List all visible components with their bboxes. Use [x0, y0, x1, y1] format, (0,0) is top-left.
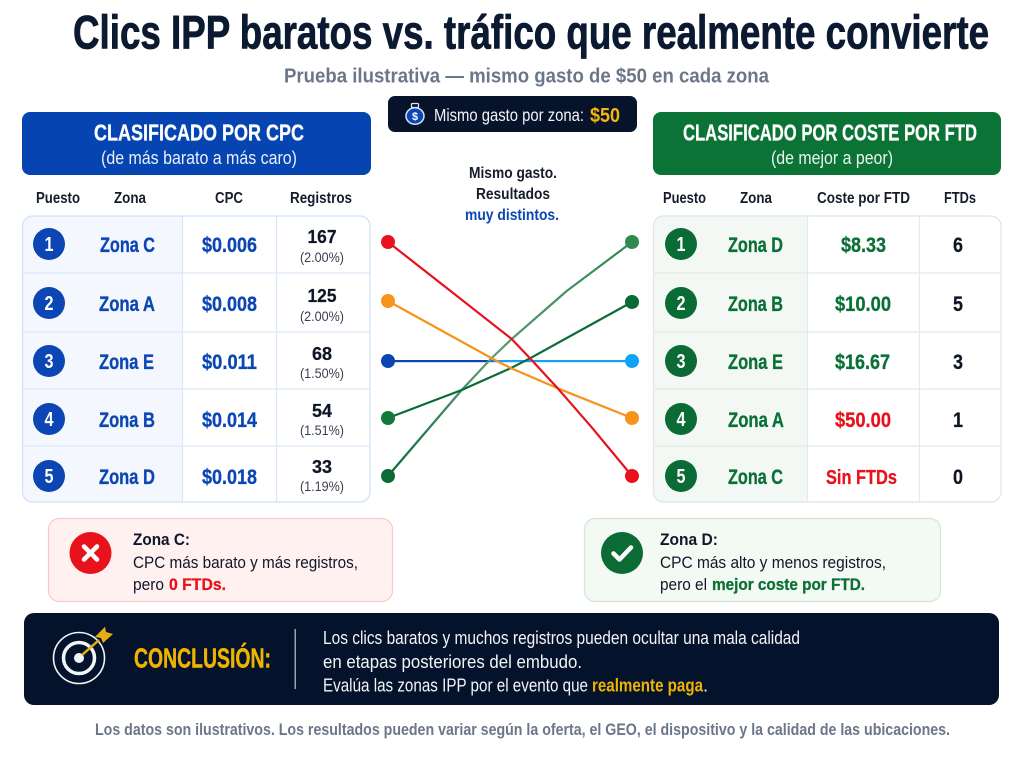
- row 4: Zona B: [33, 400, 344, 438]
- row 4: Zona A: $50.00: [835, 409, 891, 432]
- column headers: FTD table: Zona: [740, 190, 772, 207]
- row 1: Zona D: 6: [953, 234, 963, 257]
- row 2: Zona A: (2.00%): [300, 309, 344, 324]
- row 2: Zona B: [665, 287, 963, 319]
- icon: green check: [601, 532, 643, 574]
- callout: Zona D: Zona D:: [660, 530, 718, 549]
- column headers: CPC table: Registros: [290, 190, 352, 207]
- column headers: FTD table: Coste por FTD: [817, 190, 910, 207]
- badge: same spend per zone: $50: [590, 105, 620, 127]
- row 1: Zona C: $0.006: [202, 234, 257, 257]
- column headers: FTD table: Puesto: [663, 190, 706, 207]
- row 4: Zona B: Zona B: [99, 409, 155, 432]
- heading: ranked by CPC: CLASIFICADO POR CPC: [94, 120, 304, 146]
- center note: Mismo gasto.: [469, 165, 557, 182]
- column headers: FTD table: [663, 190, 976, 207]
- row 4: Zona A: 4: [676, 409, 686, 431]
- row 1: Zona D: 1: [676, 234, 686, 256]
- icon: target with arrow: [54, 627, 113, 684]
- row 1: Zona D: Zona D: [728, 234, 783, 257]
- row 2: Zona A: 125: [308, 285, 336, 306]
- panel: ranked by CPC: [22, 112, 371, 502]
- row 1: Zona C: Zona C: [100, 234, 155, 257]
- row 2: Zona B: 5: [953, 293, 963, 316]
- row 3: Zona E: 3: [953, 351, 963, 374]
- callout: Zona D: pero el: [660, 575, 707, 594]
- panel: conclusion: en etapas posteriores del embudo.: [323, 651, 582, 672]
- row 5: Zona D: Zona D: [99, 466, 155, 489]
- heading: ranked by CPC: [22, 112, 371, 175]
- row 5: Zona D: 5: [44, 466, 54, 488]
- row 2: Zona A: 2: [44, 293, 54, 315]
- callout: Zona C: pero: [133, 575, 164, 594]
- row 5: Zona D: $0.018: [202, 466, 257, 489]
- row 3: Zona E: $0.011: [202, 351, 257, 374]
- row 1: Zona C: 1: [44, 234, 54, 256]
- row 3: Zona E: 3: [676, 351, 686, 373]
- row 4: Zona B: (1.51%): [300, 423, 344, 438]
- row 5: Zona C: 0: [953, 466, 963, 489]
- row 5: Zona C: [665, 460, 963, 492]
- row 5: Zona C: 5: [676, 466, 686, 488]
- panel: conclusion: CONCLUSIÓN:: [134, 643, 271, 674]
- panel: conclusion: Los clics baratos y muchos registros pueden ocultar una mala calidad: [323, 627, 800, 648]
- center note: muy distintos.: [465, 207, 559, 224]
- row 4: Zona B: 54: [312, 400, 333, 421]
- panel: conclusion: realmente paga: [592, 674, 704, 696]
- callout: Zona D: CPC más alto y menos registros,: [660, 553, 886, 572]
- line: Zona B: [381, 295, 639, 425]
- column headers: FTD table: FTDs: [944, 190, 976, 207]
- line: Zona D: [381, 235, 639, 483]
- panel: conclusion: .: [703, 674, 708, 696]
- row 2: Zona A: Zona A: [99, 293, 155, 316]
- row 4: Zona A: Zona A: [728, 409, 784, 432]
- heading: ranked by CPC: (de más barato a más caro): [101, 148, 297, 168]
- icon: money bag: $: [412, 111, 418, 123]
- column headers: CPC table: CPC: [215, 190, 243, 207]
- row 3: Zona E: [33, 343, 344, 381]
- row 1: Zona D: [665, 228, 963, 260]
- row 3: Zona E: $16.67: [835, 351, 890, 374]
- center note: Resultados: [476, 186, 550, 203]
- row 3: Zona E: Zona E: [728, 351, 783, 374]
- icon: money bag: [406, 104, 424, 124]
- callout: Zona C: Zona C:: [133, 530, 190, 549]
- row 3: Zona E: 3: [44, 351, 54, 373]
- row 1: Zona D: $8.33: [841, 234, 886, 257]
- row 3: Zona E: (1.50%): [300, 366, 344, 381]
- row 5: Zona D: [33, 456, 344, 494]
- row 3: Zona E: Zona E: [99, 351, 154, 374]
- subtitle: Prueba ilustrativa — mismo gasto de $50 en cada zona: [284, 66, 770, 88]
- table: CPC ranking: [22, 216, 370, 502]
- row 3: Zona E: 68: [312, 343, 332, 364]
- icon: red cross: [70, 532, 112, 574]
- table: FTD ranking: [653, 216, 1001, 502]
- row 2: Zona A: $0.008: [202, 293, 257, 316]
- row 5: Zona D: (1.19%): [300, 479, 344, 494]
- panel: ranked by cost per FTD: [653, 112, 1001, 502]
- line: Zona C: [381, 235, 639, 483]
- row 1: Zona C: [33, 226, 344, 265]
- callout: Zona C: [48, 518, 392, 602]
- row 1: Zona C: 167: [308, 226, 336, 247]
- callout: Zona C: CPC más barato y más registros,: [133, 553, 358, 572]
- callout: Zona C: 0 FTDs.: [169, 575, 226, 594]
- column headers: CPC table: [36, 190, 352, 207]
- callout: Zona D: mejor coste por FTD.: [712, 575, 865, 594]
- column headers: CPC table: Puesto: [36, 190, 80, 207]
- column headers: CPC table: Zona: [114, 190, 146, 207]
- row 4: Zona B: $0.014: [202, 409, 257, 432]
- line: Zona A: [381, 294, 639, 425]
- panel: conclusion: Evalúa las zonas IPP por el evento que: [323, 674, 588, 696]
- badge: same spend per zone: [388, 96, 637, 132]
- row 2: Zona B: 2: [676, 293, 686, 315]
- row 5: Zona C: Sin FTDs: [826, 467, 897, 489]
- panel: conclusion: [24, 613, 999, 705]
- heading: ranked by cost per FTD: [653, 112, 1001, 175]
- row 4: Zona B: 4: [44, 409, 54, 431]
- heading: ranked by cost per FTD: (de mejor a peor): [771, 148, 893, 168]
- row 5: Zona D: 33: [312, 456, 332, 477]
- row 2: Zona B: Zona B: [728, 293, 783, 316]
- row 4: Zona A: [665, 403, 963, 435]
- row 5: Zona C: Zona C: [728, 466, 783, 489]
- callout: Zona D: [584, 518, 940, 602]
- center note: [465, 165, 559, 224]
- badge: same spend per zone: Mismo gasto por zona:: [434, 105, 584, 125]
- chart: rank connection lines: [381, 235, 639, 483]
- row 2: Zona A: [33, 285, 344, 324]
- line: Zona E: [381, 354, 639, 368]
- row 3: Zona E: [665, 345, 963, 377]
- row 4: Zona A: 1: [953, 409, 963, 432]
- row 1: Zona C: (2.00%): [300, 250, 344, 265]
- row 2: Zona B: $10.00: [835, 293, 891, 316]
